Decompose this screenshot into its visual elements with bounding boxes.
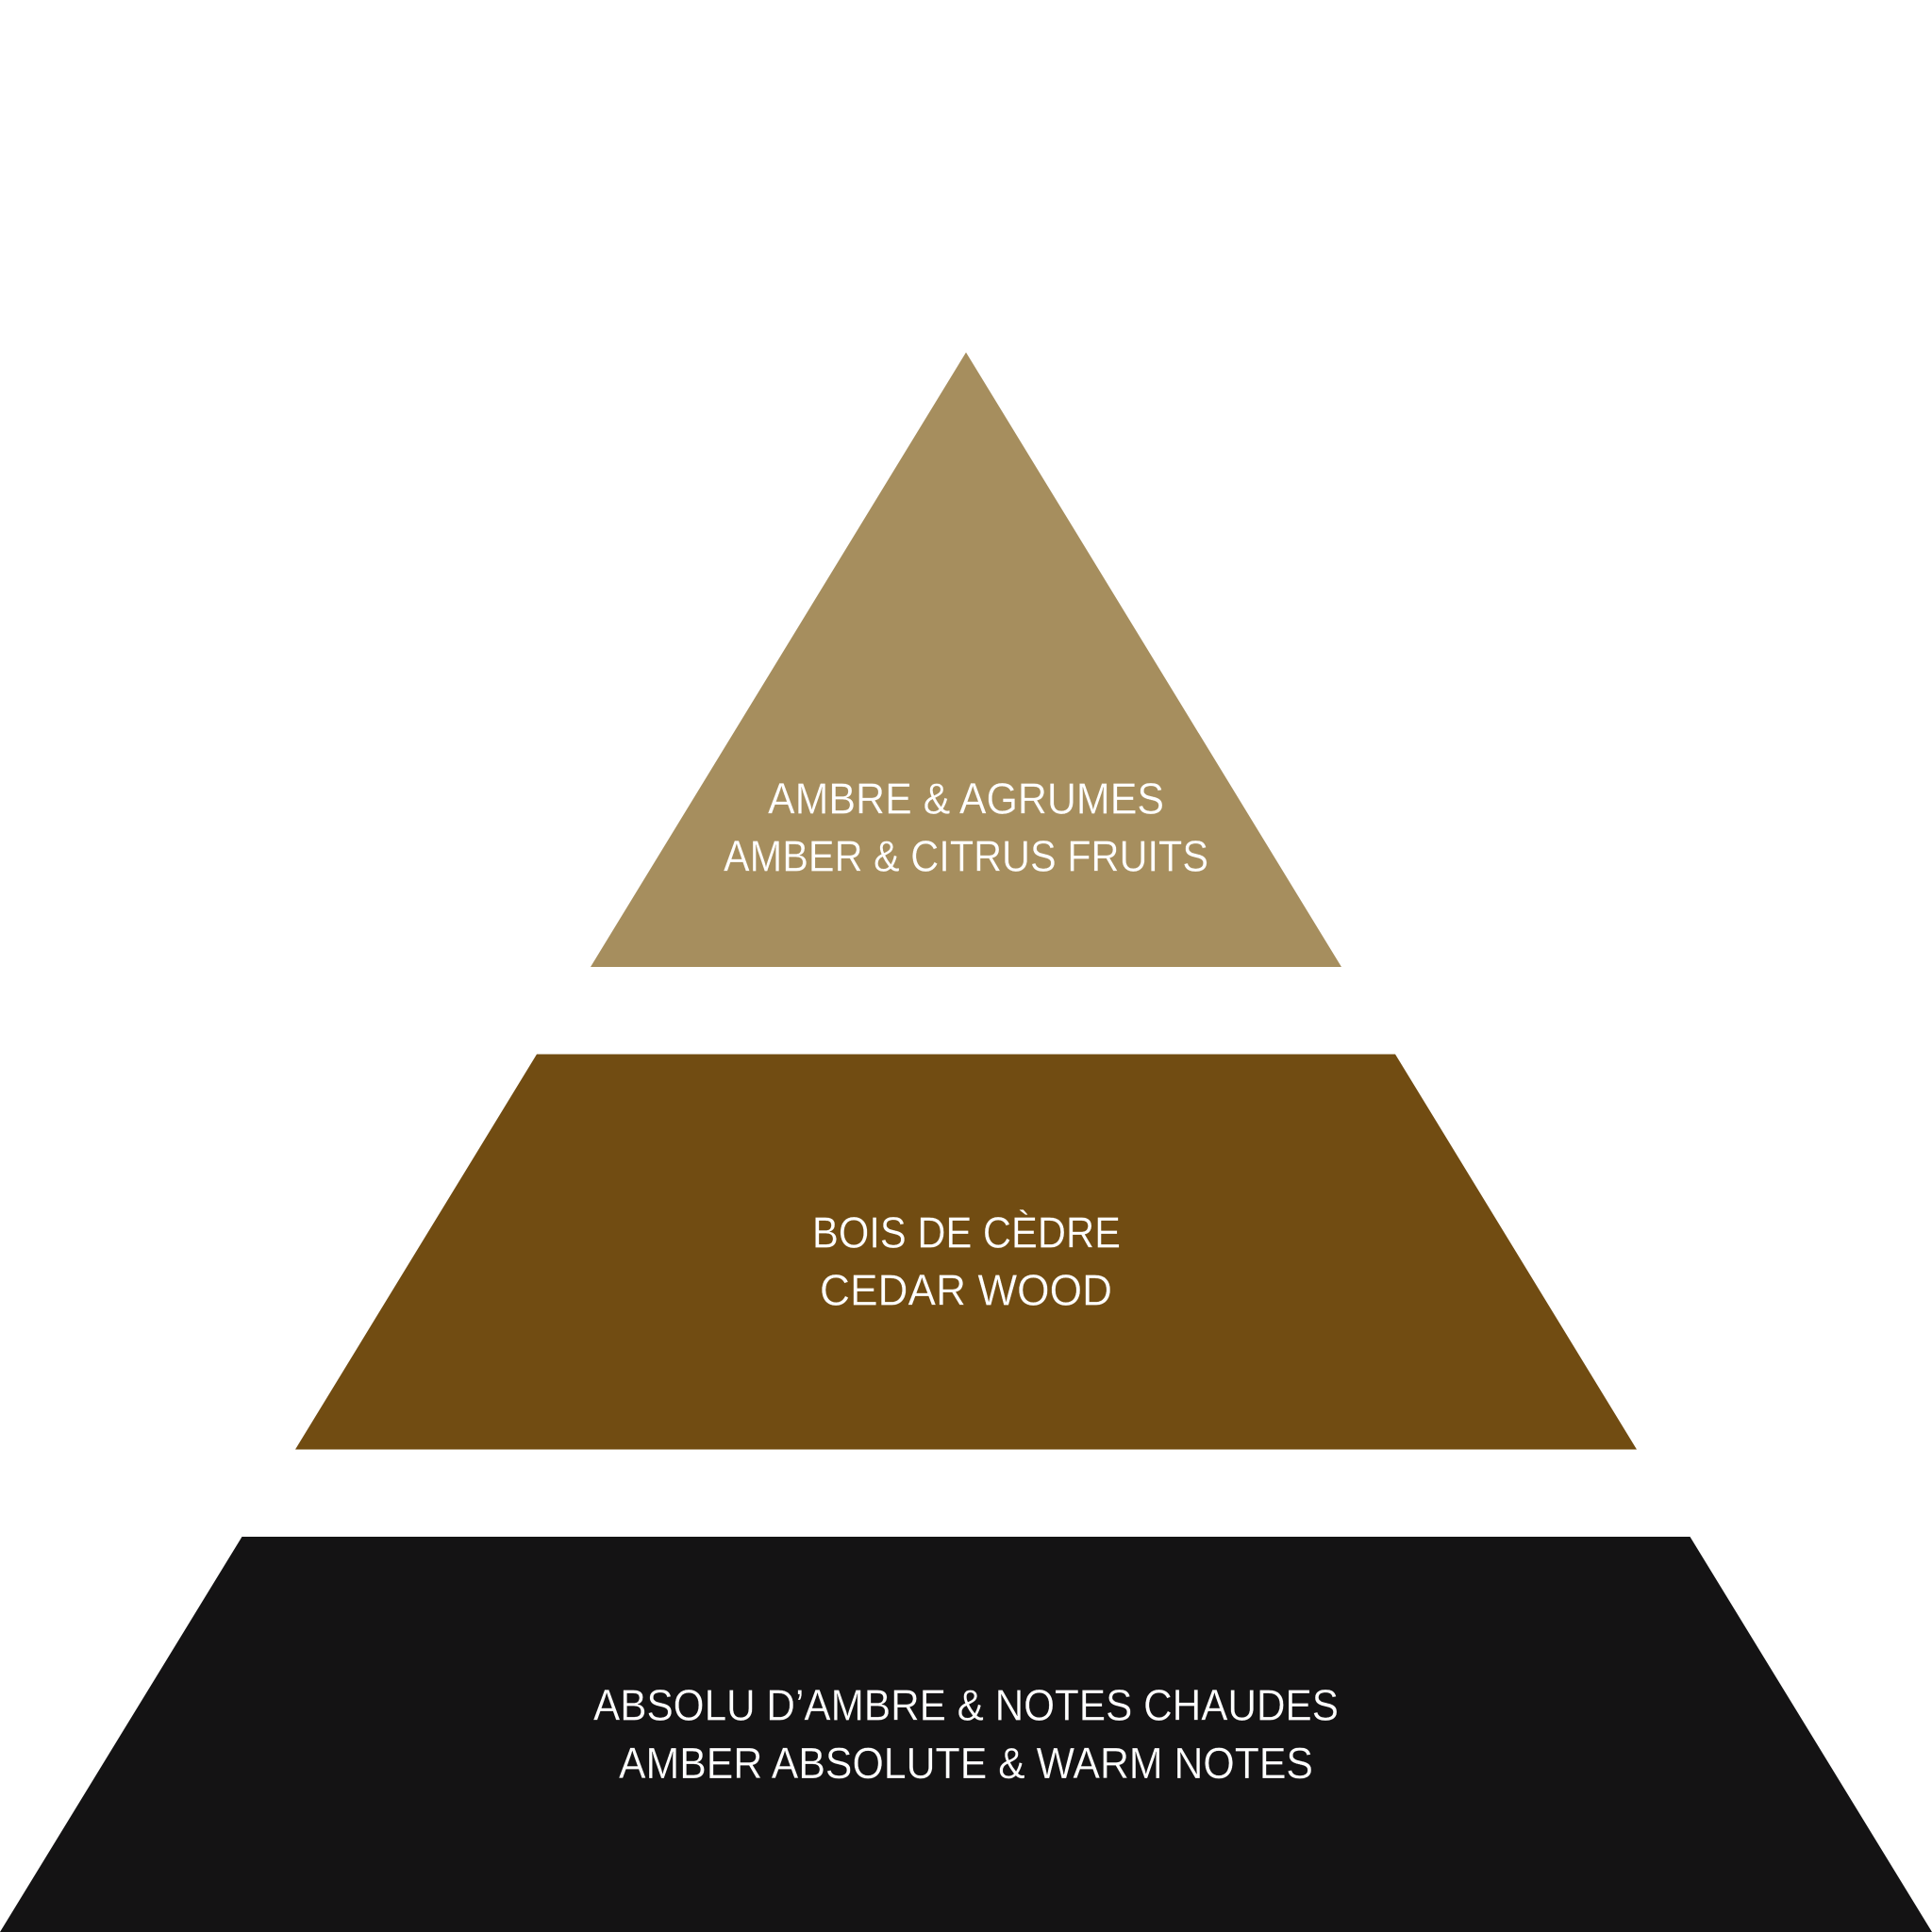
- text: base notes label: AMBER ABSOLUTE & WARM NOTES: [619, 1739, 1313, 1788]
- panel: heart notes: [295, 1055, 1637, 1449]
- text: top notes label: AMBER & CITRUS FRUITS: [724, 832, 1208, 881]
- text: heart notes label: CEDAR WOOD: [820, 1266, 1112, 1315]
- text: base notes label: [593, 1681, 1339, 1788]
- text: base notes label: ABSOLU D’AMBRE & NOTES CHAUDES: [593, 1681, 1339, 1730]
- panel: top notes: [591, 353, 1341, 967]
- text: heart notes label: [812, 1208, 1121, 1315]
- text: top notes label: AMBRE & AGRUMES: [768, 774, 1164, 823]
- text: heart notes label: BOIS DE CÈDRE: [812, 1208, 1121, 1257]
- text: top notes label: [724, 774, 1208, 881]
- panel: base notes: [0, 1537, 1932, 1932]
